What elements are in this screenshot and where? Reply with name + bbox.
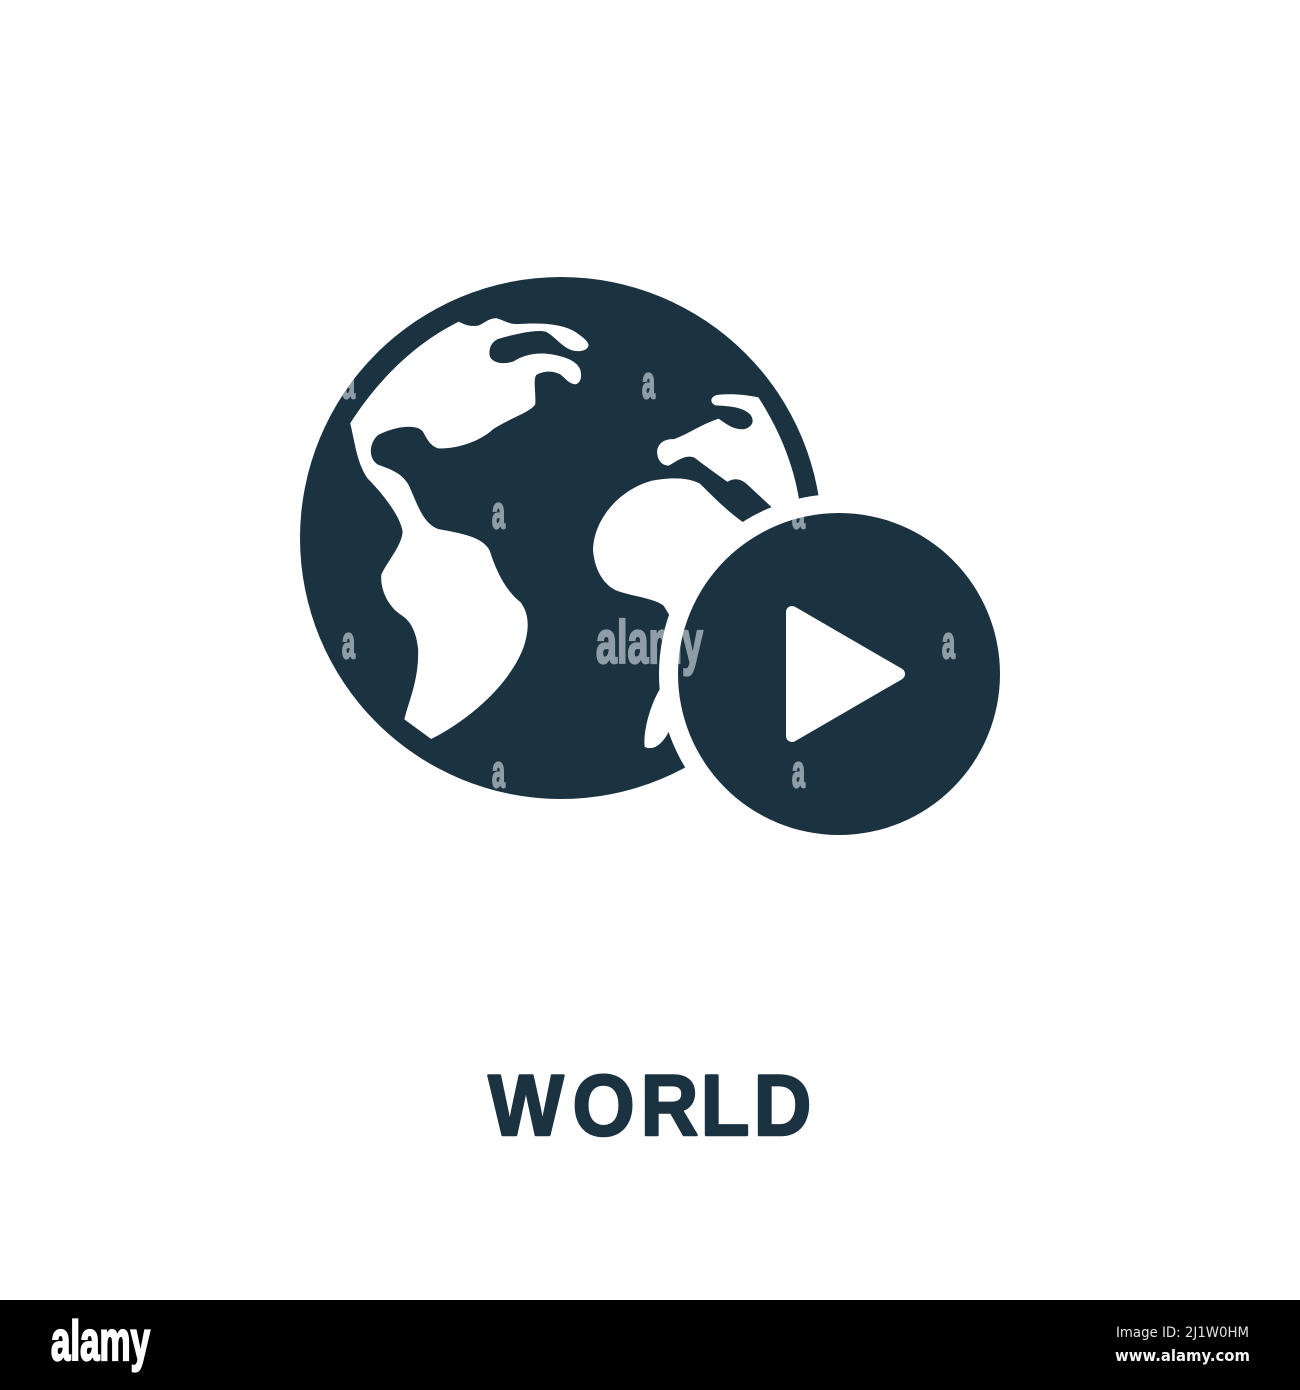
- watermark: repeated a marks: a: [942, 617, 956, 668]
- watermark: repeated a marks: a: [492, 746, 506, 797]
- watermark: repeated a marks: a: [792, 746, 806, 797]
- watermark: repeated a marks: [342, 357, 956, 797]
- footer logo: alamy: [51, 1309, 150, 1372]
- title: WORLD: [488, 1057, 811, 1154]
- continents: Americas: [350, 318, 589, 739]
- play button halo: [659, 494, 1019, 854]
- icon: globe with play button: [300, 277, 1019, 854]
- play button disc: [678, 513, 1000, 835]
- watermark: repeated a marks: a: [792, 487, 806, 538]
- continents: Africa: [593, 478, 772, 615]
- watermark: repeated a marks: a: [642, 357, 656, 408]
- continents: Europe: [657, 394, 810, 521]
- watermark: repeated a marks: a: [342, 357, 356, 408]
- globe: [300, 277, 822, 799]
- play triangle: [792, 612, 899, 736]
- continents: Madagascar: [644, 688, 703, 748]
- website: www.alamy.com: [1115, 1346, 1250, 1365]
- image id: Image ID: 2J1W0HM: [1116, 1325, 1249, 1341]
- watermark: repeated a marks: a: [492, 487, 506, 538]
- watermark: repeated a marks: a: [342, 617, 356, 668]
- watermark: alamy center: alamy: [596, 609, 703, 676]
- footer bar: [0, 1300, 1300, 1390]
